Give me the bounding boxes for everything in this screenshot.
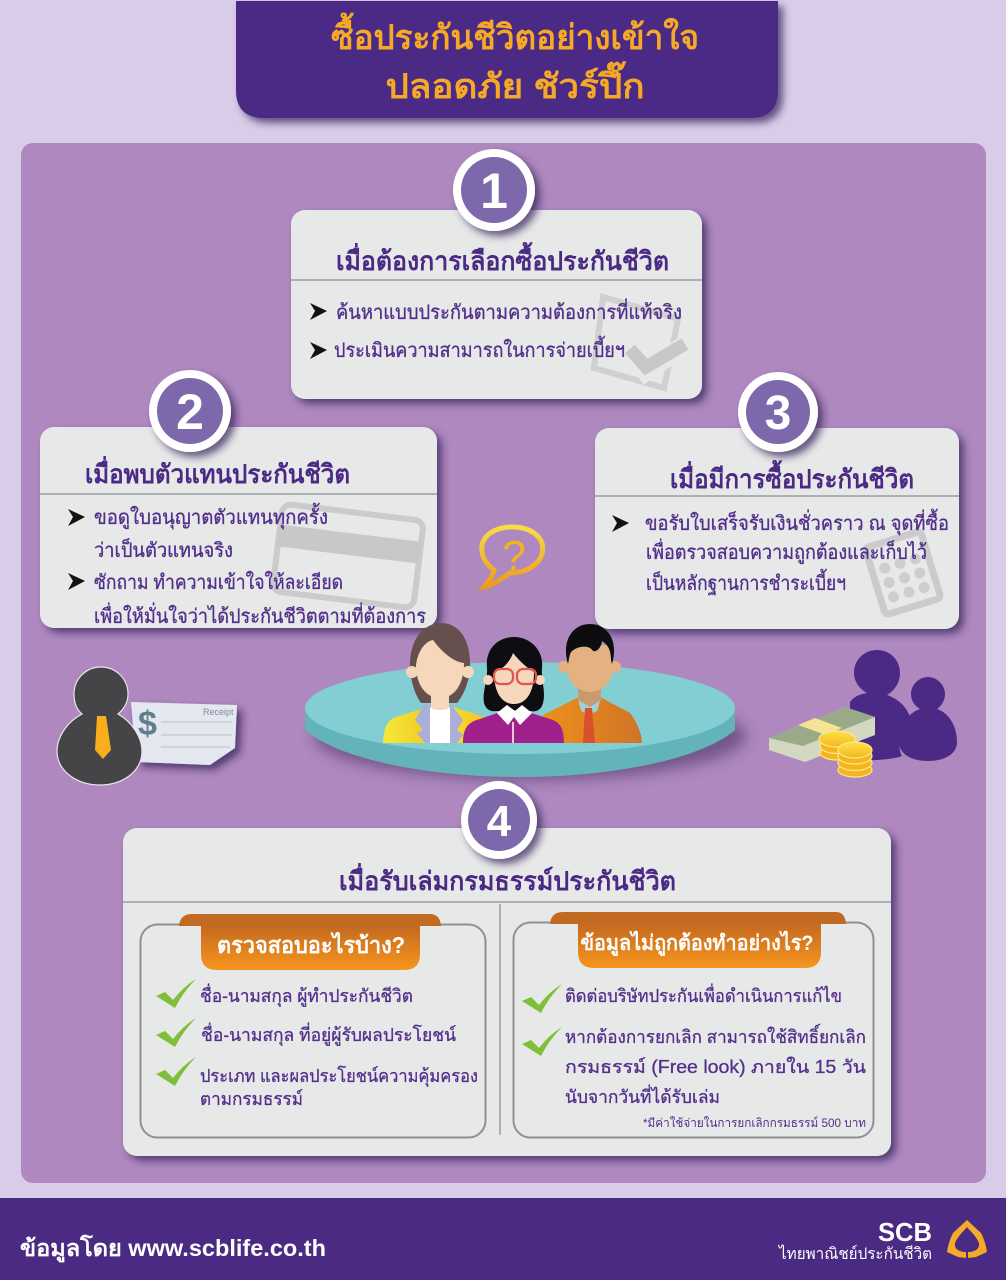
footer bar [0, 1198, 1006, 1280]
receipt: $ [138, 705, 157, 743]
checklist: ประเภท และผลประโยชน์ความคุ้มครอง [200, 1065, 478, 1087]
bullet list [68, 503, 426, 628]
bullet list: เป็นหลักฐานการชำระเบี้ยฯ [646, 569, 846, 595]
badge: number 2: 2 [176, 384, 204, 440]
bullet list: ว่าเป็นตัวแทนจริง [94, 537, 233, 562]
checklist: ชื่อ-นามสกุล ผู้ทำประกันชีวิต [200, 983, 413, 1007]
SCB wordmark: ไทยพาณิชย์ประกันชีวิต [777, 1244, 932, 1263]
source credit: ข้อมูลโดย www.scblife.co.th [20, 1234, 326, 1263]
panel: step 3 on purchase [595, 428, 959, 629]
sub-panel: if information is wrong: ข้อมูลไม่ถูกต้องทำอย่างไร? [580, 930, 814, 957]
sub-panel: if information is wrong [514, 912, 874, 1138]
table [305, 710, 735, 777]
SCB wordmark [777, 1217, 932, 1263]
checklist: ติดต่อบริษัทประกันเพื่อดำเนินการแก้ไข [565, 983, 842, 1006]
badge: number 1: 1 [480, 163, 508, 219]
bullet list: ค้นหาแบบประกันตามความต้องการที่แท้จริง [336, 298, 682, 324]
icon: clipboard watermark [594, 297, 687, 388]
badge: number 3 [738, 372, 818, 452]
checklist: กรมธรรม์ (Free look) ภายใน 15 วัน [565, 1056, 866, 1077]
SCB wordmark: SCB [878, 1217, 932, 1247]
icon: credit card watermark [272, 504, 424, 608]
icon: agent with receipt [57, 667, 237, 785]
bullet list: ขอดูใบอนุญาตตัวแทนทุกครั้ง [94, 503, 328, 530]
badge: number 2 [149, 370, 231, 452]
checklist: ตามกรมธรรม์ [200, 1089, 303, 1109]
bundle of banknotes [769, 707, 875, 762]
title banner: ปลอดภัย ชัวร์ปึ๊ก [386, 61, 644, 106]
sub-panel: what to check [140, 914, 486, 1138]
sub-panel: what to check: ตรวจสอบอะไรบ้าง? [217, 931, 405, 958]
heading: เมื่อมีการซื้อประกันชีวิต [670, 459, 914, 494]
heading: เมื่อรับเล่มกรมธรรม์ประกันชีวิต [339, 862, 676, 896]
small person [899, 677, 957, 761]
title banner: ซื้อประกันชีวิตอย่างเข้าใจ [331, 12, 699, 57]
checklist [156, 979, 478, 1109]
icon: family with money [769, 650, 957, 777]
icon: question speech bubble: ? [502, 532, 526, 579]
badge: number 1 [453, 149, 535, 231]
icon: question speech bubble [482, 527, 543, 587]
main purple panel [21, 143, 986, 1183]
checklist [522, 983, 866, 1130]
large person [850, 650, 911, 760]
bullet list [310, 298, 682, 362]
badge: number 4: 4 [487, 797, 512, 846]
panel: step 4 receiving the policy [123, 828, 891, 1156]
checklist: *มีค่าใช้จ่ายในการยกเลิกกรมธรรม์ 500 บาท [643, 1116, 866, 1130]
receipt: Receipt [203, 707, 234, 717]
heading: เมื่อพบตัวแทนประกันชีวิต [85, 455, 350, 489]
checklist: ชื่อ-นามสกุล ที่อยู่ผู้รับผลประโยชน์ [201, 1022, 456, 1046]
person: woman with red glasses [463, 637, 564, 743]
checklist: นับจากวันที่ได้รับเล่ม [565, 1084, 720, 1107]
person: man in orange shirt [543, 624, 642, 743]
gold coins [819, 731, 872, 777]
checklist: หากต้องการยกเลิก สามารถใช้สิทธิ์ยกเลิก [565, 1023, 866, 1047]
icon: SCB logo [947, 1220, 987, 1258]
bullet list: เพื่อตรวจสอบความถูกต้องและเก็บไว้ [646, 538, 927, 565]
bullet list: ประเมินความสามารถในการจ่ายเบี้ยฯ [334, 336, 625, 362]
panel: step 2 meeting an agent [40, 427, 437, 628]
figure [57, 667, 142, 785]
badge: number 4 [461, 781, 537, 859]
bullet list: เพื่อให้มั่นใจว่าได้ประกันชีวิตตามที่ต้องการ [94, 602, 426, 628]
bullet list: ขอรับใบเสร็จรับเงินชั่วคราว ณ จุดที่ซื้อ [645, 509, 949, 536]
bullet list: ซักถาม ทำความเข้าใจให้ละเอียด [94, 571, 343, 594]
title banner [236, 1, 778, 118]
illustration: three people at a round table [305, 623, 746, 780]
person: woman in yellow jacket [383, 623, 484, 743]
heading: เมื่อต้องการเลือกซื้อประกันชีวิต [336, 241, 669, 276]
icon: calculator watermark [865, 531, 941, 615]
receipt [131, 702, 237, 765]
bullet list [612, 509, 949, 595]
panel: step 1 choosing insurance [291, 210, 702, 399]
badge: number 3: 3 [765, 387, 791, 440]
